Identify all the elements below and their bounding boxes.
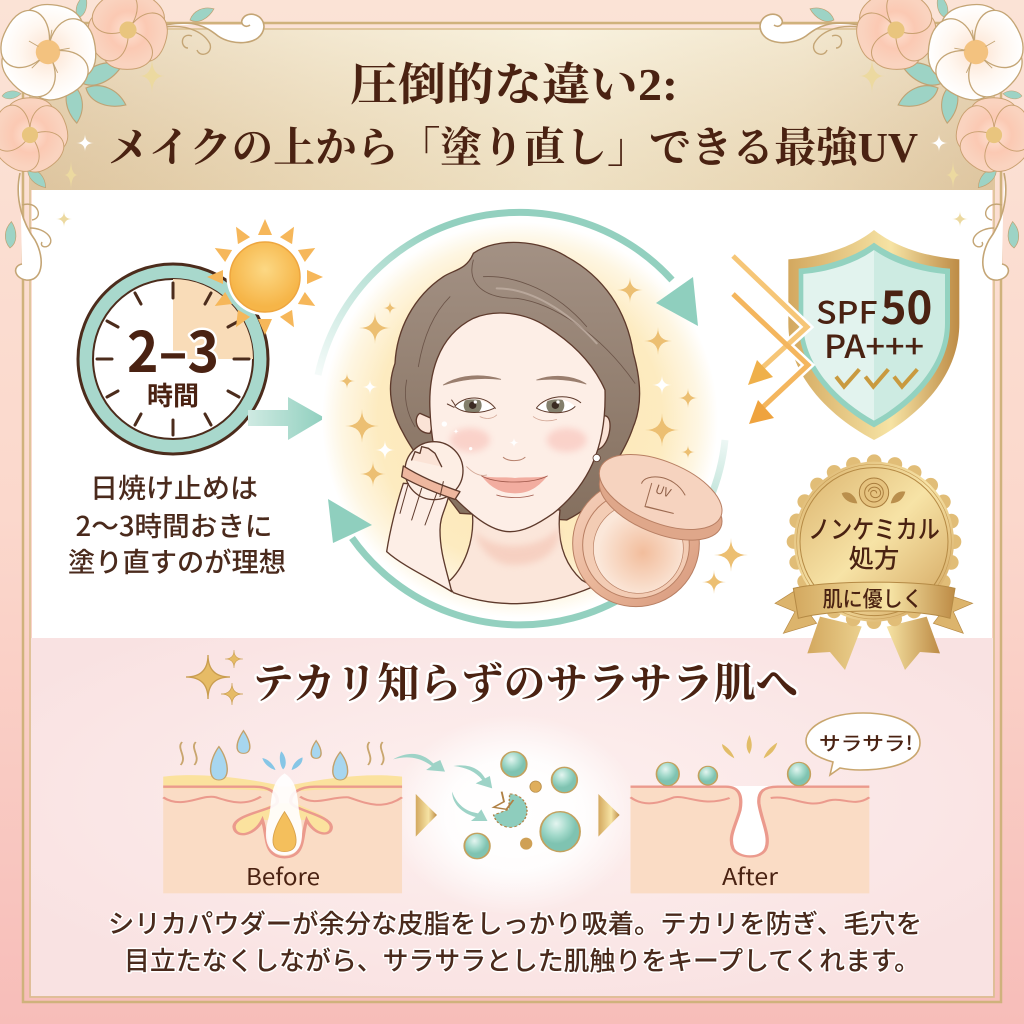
icon: gold sparkles beside heading xyxy=(186,650,243,705)
icon: UV rays deflected xyxy=(733,256,808,424)
sparkles around face xyxy=(339,277,748,594)
text: reapply note: 日焼け止めは xyxy=(90,467,258,506)
title: 圧倒的な違い2: xyxy=(350,60,678,110)
text: reapply note xyxy=(68,467,286,580)
before panel xyxy=(163,731,402,893)
hair xyxy=(390,242,640,520)
earring xyxy=(593,454,600,462)
clock label: 2–3 xyxy=(127,308,219,389)
blush xyxy=(450,428,490,452)
cycle arrows xyxy=(318,212,725,625)
lips xyxy=(482,476,547,493)
text: description: シリカパウダーが余分な皮脂をしっかり吸着。テカリを防ぎ、毛穴を xyxy=(108,904,922,941)
diagram: before, silica, after xyxy=(163,731,869,893)
arrow: clock to face xyxy=(248,397,325,440)
title: メイクの上から「塗り直し」できる最強UV xyxy=(108,125,918,172)
sparkles on cheek xyxy=(442,421,519,450)
teal arrows xyxy=(393,754,492,821)
gold triangles xyxy=(416,794,437,837)
corner ornament: top right xyxy=(760,0,1024,280)
icon: clock with sun xyxy=(78,219,323,454)
brows xyxy=(443,376,586,385)
corner ornament: top left xyxy=(0,0,264,280)
nose xyxy=(503,457,525,461)
shield text xyxy=(816,272,932,368)
medal text xyxy=(808,510,940,575)
cushion compact: UV xyxy=(653,480,673,501)
eyes xyxy=(455,399,575,413)
speech bubble: sarasara: サラサラ! xyxy=(819,729,913,756)
heading: oil control: テカリ知らずのサラサラ肌へ xyxy=(252,661,798,708)
medal text: ノンケミカル xyxy=(808,510,940,546)
glow behind face xyxy=(322,222,718,618)
glow behind silica diagram xyxy=(390,715,640,915)
text: description xyxy=(108,904,922,978)
panel: header band xyxy=(31,30,993,190)
ears xyxy=(416,413,610,450)
text: reapply note: 塗り直すのが理想 xyxy=(68,541,286,580)
panel: oil control section background xyxy=(31,638,993,996)
speech bubble: sarasara xyxy=(806,713,920,775)
clock label: 時間 xyxy=(147,376,199,413)
after panel xyxy=(630,735,869,893)
neck and chest xyxy=(447,507,593,604)
label: before: Before xyxy=(246,858,320,892)
text: description: 目立たなくしながら、サラサラとした肌触りをキープしてくれます。 xyxy=(124,941,920,978)
hair strands xyxy=(405,260,635,427)
badge: non-chemical medal: 肌に優しく xyxy=(823,583,923,614)
silica particles xyxy=(464,752,580,859)
title xyxy=(108,60,918,172)
medal text: 処方 xyxy=(849,539,899,575)
hand and puff xyxy=(387,483,452,592)
cushion compact xyxy=(573,439,732,607)
badge: non-chemical medal xyxy=(775,462,973,670)
shield text: 50 xyxy=(881,272,932,337)
label: after: After xyxy=(722,858,778,892)
shield text: PA+++ xyxy=(824,322,924,368)
illustration: woman applying cushion compact xyxy=(387,242,732,607)
face xyxy=(430,313,605,532)
text: reapply note: 2〜3時間おきに xyxy=(76,505,272,544)
shield: SPF50 PA+++ xyxy=(788,230,959,440)
rose emblem xyxy=(859,478,889,507)
shield text: SPF xyxy=(816,287,878,332)
